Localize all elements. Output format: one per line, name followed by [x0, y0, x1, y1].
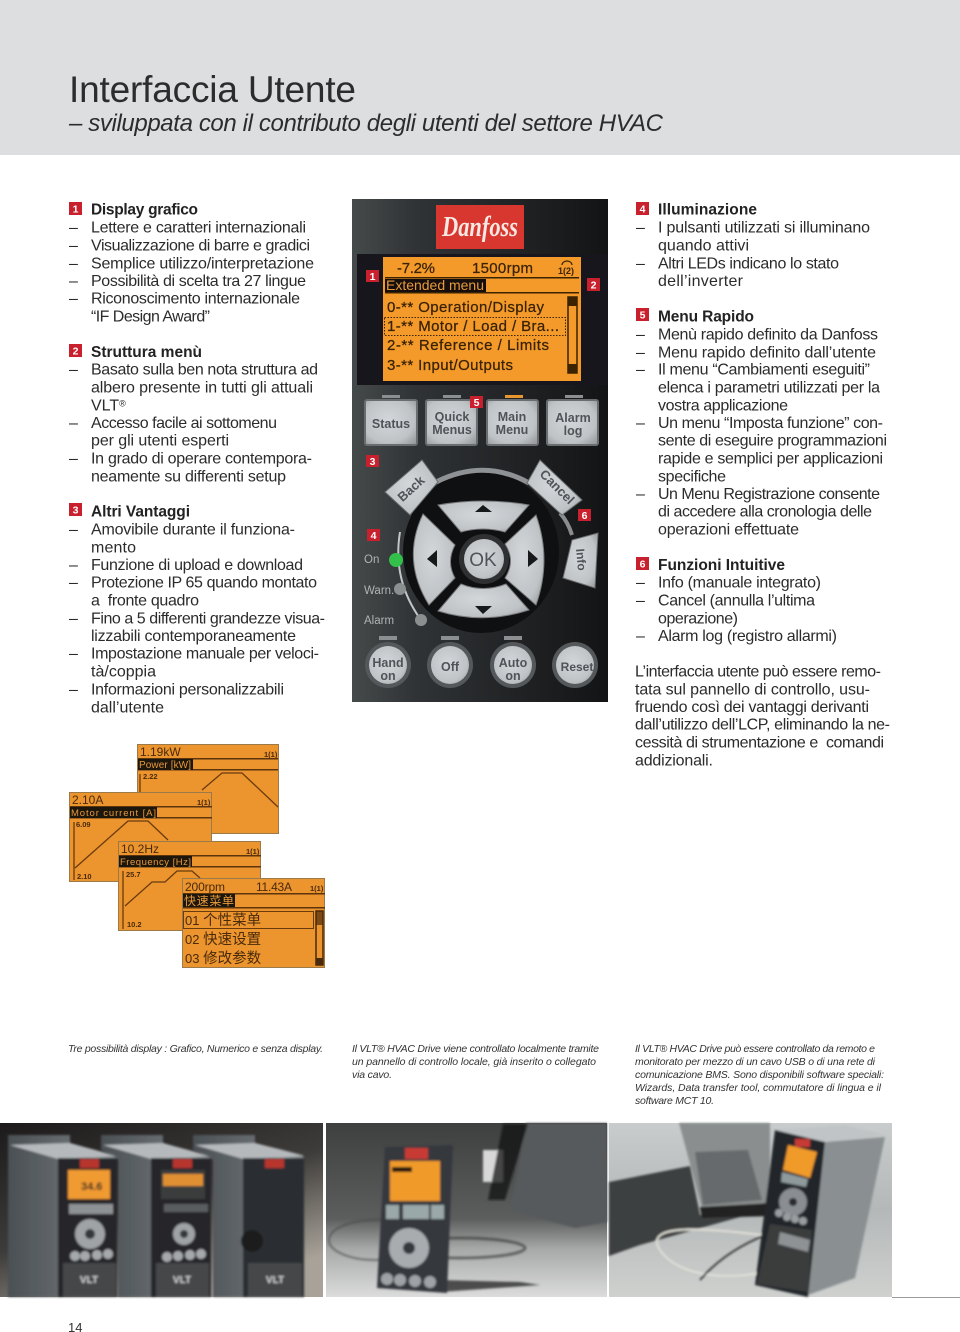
bottom keys: Reset: [561, 660, 593, 674]
drive with graphic display: 34.6: [81, 1181, 102, 1193]
section 5: menu rapido: –: [636, 326, 645, 344]
menu keys: [365, 395, 598, 445]
section 2: struttura menu: In grado di operare contempora-: [91, 450, 312, 468]
screen: power: 1(1): [264, 750, 278, 759]
drive with numeric display: [101, 1135, 211, 1297]
back, cancel, info keys and arc: Info: [573, 548, 589, 571]
section 1: display grafico: Visualizzazione di barre e gradici: [91, 238, 310, 254]
section 3: altri vantaggi: Protezione IP 65 quando montato: [91, 574, 317, 592]
display screen: 3-** Input/Outputs: [387, 357, 513, 374]
bottom keys: on: [505, 669, 521, 683]
badge 5: 5: [640, 310, 646, 322]
control panel device: [377, 1145, 453, 1293]
screen: motor current: Motor current [A]: [71, 808, 156, 819]
OK button: OK: [469, 550, 497, 571]
section 5: menu rapido: operazioni effettuate: [658, 522, 799, 538]
section 1: display grafico: –: [69, 256, 78, 272]
display screen: 1500rpm: [472, 260, 533, 277]
section 5: menu rapido: –: [636, 415, 645, 432]
section 6: funzioni intuitive: [636, 557, 837, 645]
section 4: illuminazione: I pulsanti utilizzati si illuminano: [658, 220, 870, 236]
bottom keys: on: [380, 669, 396, 683]
section 4: illuminazione: Illuminazione: [658, 202, 757, 218]
badge 3: [69, 503, 82, 516]
bottom keys: [365, 636, 598, 688]
screen: motor current: [70, 792, 212, 882]
back, cancel, info keys and arc: [385, 460, 598, 633]
section 4: illuminazione: –: [636, 256, 645, 272]
small display screens: [70, 744, 325, 968]
back, cancel, info keys and arc: Back: [394, 472, 428, 505]
screen: power: Power [kW]: [139, 760, 191, 771]
screen: quick menu: 11.43A: [256, 880, 292, 894]
section 5: menu rapido: –: [636, 344, 645, 362]
caption: display options: Tre possibilità display : Grafico, Numerico e senza display.: [68, 1043, 323, 1055]
section 4: illuminazione: dell’inverter: [658, 273, 744, 290]
badge 4: 4: [640, 204, 646, 216]
section 5: menu rapido: Menu rapido definito dall’utente: [658, 344, 876, 362]
back, cancel, info keys and arc: Cancel: [537, 466, 578, 507]
screen: frequency: 25.7: [126, 870, 141, 879]
closing paragraph: tata sul pannello di controllo, usu-: [635, 682, 870, 698]
section 2: struttura menu: Accesso facile ai sottomenu: [91, 415, 277, 432]
badge 1: 1: [73, 204, 79, 216]
section 3: altri vantaggi: –: [69, 682, 78, 698]
section 6: funzioni intuitive: Info (manuale integrato): [658, 574, 821, 592]
screen: motor current: 2.10: [77, 872, 92, 881]
section 2: struttura menu: Struttura menù: [91, 344, 202, 361]
menu keys: Menu: [496, 423, 528, 437]
menu keys: Menus: [432, 423, 472, 437]
status LEDs: Warn.: [364, 585, 394, 597]
section 6: funzioni intuitive: operazione): [658, 610, 738, 628]
screen: quick menu: [182, 878, 325, 968]
section 3: altri vantaggi: Amovibile durante il funziona-: [91, 522, 295, 538]
section 6: funzioni intuitive: Alarm log (registro allarmi): [658, 628, 837, 645]
section 1: display grafico: Display grafico: [91, 202, 198, 218]
badge 2: [69, 344, 82, 358]
section 3: altri vantaggi: [69, 503, 325, 716]
display screen: 2-** Reference / Limits: [387, 337, 549, 354]
section 5: menu rapido: –: [636, 362, 645, 378]
section 5: menu rapido: Menù rapido definito da Danfoss: [658, 326, 878, 344]
screen: power: 2.22: [143, 772, 158, 781]
screen: motor current: 2.10A: [72, 793, 103, 807]
bottom keys: Hand: [372, 656, 404, 670]
badge 3: 3: [73, 504, 79, 516]
closing paragraph: [635, 664, 890, 770]
screen: quick menu: 1(1): [310, 884, 324, 893]
section 2: struttura menu: ®: [119, 398, 126, 408]
title: Interfaccia Utente: [69, 69, 356, 110]
section 3: altri vantaggi: –: [69, 646, 78, 662]
section 1: display grafico: –: [69, 220, 78, 236]
display screen: -7.2%: [397, 260, 435, 277]
screen: motor current: 1(1): [197, 798, 211, 807]
navigation pad: [413, 501, 544, 618]
drive unit: [755, 1125, 885, 1297]
panel: LCP control panel: [352, 199, 608, 702]
section 6: funzioni intuitive: Cancel (annulla l’ultima: [658, 592, 815, 610]
callout markers: 1: [370, 271, 376, 283]
menu keys: Alarm: [555, 411, 591, 425]
screen: quick menu: 01 个性菜单: [185, 912, 261, 929]
badge 2: 2: [73, 346, 79, 358]
photo: drive connected to laptop: [609, 1123, 892, 1297]
section 6: funzioni intuitive: –: [636, 628, 645, 645]
section 3: altri vantaggi: Impostazione manuale per veloci-: [91, 646, 319, 662]
drive without display: [193, 1135, 304, 1297]
closing paragraph: fruendo così dei vantaggi derivanti: [635, 699, 869, 716]
section 5: menu rapido: sente di eseguire programmazioni: [658, 432, 887, 450]
caption: remote control: [635, 1043, 884, 1107]
closing paragraph: cessità di strumentazione e comandi: [635, 734, 884, 752]
caption: remote control: monitorato per mezzo di un cavo USB o di una rete di: [635, 1056, 876, 1068]
section 3: altri vantaggi: –: [69, 574, 78, 592]
section 3: altri vantaggi: –: [69, 610, 78, 628]
menu keys: Status: [372, 417, 410, 431]
display screen: 0-** Operation/Display: [387, 299, 544, 316]
screen: frequency: Frequency [Hz]: [120, 857, 191, 868]
closing paragraph: dall’utilizzo dell’LCP, eliminando la ne-: [635, 716, 890, 734]
caption: local control: Il VLT® HVAC Drive viene controllato localmente tramite: [352, 1043, 599, 1055]
header band: [0, 0, 960, 155]
caption: local control: via cavo.: [352, 1069, 392, 1081]
section 5: menu rapido: Il menu “Cambiamenti eseguiti”: [658, 362, 870, 378]
caption: remote control: comunicazione BMS. Sono disponibili software speciali:: [635, 1069, 884, 1081]
section 1: display grafico: Possibilità di scelta tra 27 lingue: [91, 273, 306, 290]
section 3: altri vantaggi: tà/coppia: [91, 664, 156, 680]
section 5: menu rapido: rapide e semplici per applicazioni: [658, 450, 883, 468]
badge 5: [636, 308, 649, 322]
section 2: struttura menu: [69, 344, 318, 486]
section 3: altri vantaggi: Funzione di upload e download: [91, 557, 303, 574]
section 3: altri vantaggi: –: [69, 522, 78, 538]
screen: quick menu: 03 修改参数: [185, 950, 262, 967]
closing paragraph: L’interfaccia utente può essere remo-: [635, 664, 881, 680]
callout markers: 4: [371, 530, 377, 542]
Danfoss logo: [436, 205, 524, 249]
drive with graphic display: [8, 1135, 117, 1297]
section 3: altri vantaggi: Fino a 5 differenti grandezze visua-: [91, 610, 325, 628]
Danfoss logo: Danfoss: [441, 211, 518, 243]
menu keys: Quick: [435, 410, 469, 424]
caption: remote control: software MCT 10.: [635, 1095, 714, 1107]
left column: features 1-3: [69, 202, 325, 716]
callout markers: 3: [370, 456, 376, 468]
section 4: illuminazione: [636, 202, 870, 290]
screen: quick menu: 200rpm: [185, 880, 225, 894]
section 3: altri vantaggi: Altri Vantaggi: [91, 504, 190, 520]
section 1: display grafico: –: [69, 238, 78, 254]
display screen: [357, 254, 608, 385]
section 3: altri vantaggi: mento: [91, 540, 136, 556]
callout markers: 5: [474, 397, 480, 409]
badge 4: [636, 202, 649, 216]
caption: local control: [352, 1043, 599, 1081]
callout markers: 2: [591, 280, 597, 292]
caption: local control: un pannello di controllo locale, già inserito o collegato: [352, 1056, 596, 1068]
section 2: struttura menu: –: [69, 415, 78, 432]
caption: remote control: Wizards, Data transfer tool, commutatore di lingua e il: [635, 1082, 882, 1094]
section 5: menu rapido: [636, 308, 887, 538]
photo: handheld panel: [326, 1123, 607, 1297]
section 6: funzioni intuitive: –: [636, 592, 645, 610]
section 5: menu rapido: Menu Rapido: [658, 308, 754, 326]
section 5: menu rapido: Un menu “Imposta funzione” con-: [658, 415, 883, 432]
section 3: altri vantaggi: a fronte quadro: [91, 592, 199, 610]
closing paragraph: addizionali.: [635, 752, 713, 770]
section 2: struttura menu: neamente su differenti setup: [91, 468, 286, 486]
section 1: display grafico: –: [69, 273, 78, 290]
screen: quick menu: 02 快速设置: [185, 931, 261, 948]
section 5: menu rapido: –: [636, 486, 645, 503]
section 3: altri vantaggi: Informazioni personalizzabili: [91, 682, 284, 698]
badge 6: [636, 557, 649, 570]
drive with numeric display: VLT: [173, 1275, 191, 1286]
status LEDs: [364, 532, 427, 627]
section 5: menu rapido: specifiche: [658, 468, 726, 486]
screen: quick menu: 快速菜单: [184, 894, 234, 908]
caption: remote control: Il VLT® HVAC Drive può essere controllato da remoto e: [635, 1043, 875, 1055]
right column: features 4-6: [635, 202, 890, 770]
subtitle: – sviluppata con il contributo degli utenti del settore HVAC: [68, 110, 664, 137]
section 1: display grafico: –: [69, 290, 78, 308]
section 5: menu rapido: elenca i parametri utilizzati per la: [658, 380, 880, 396]
status LEDs: On: [364, 554, 379, 566]
drive without display: VLT: [266, 1275, 284, 1286]
menu keys: Main: [498, 410, 526, 424]
section 4: illuminazione: Altri LEDs indicano lo stato: [658, 256, 839, 272]
menu keys: log: [564, 424, 582, 438]
section 2: struttura menu: Basato sulla ben nota struttura ad: [91, 362, 318, 378]
screen: power: 1.19kW: [140, 745, 181, 759]
callout markers: [366, 270, 600, 542]
screen: frequency: 10.2: [127, 920, 142, 929]
section 5: menu rapido: vostra applicazione: [658, 398, 788, 414]
section 2: struttura menu: per gli utenti esperti: [91, 432, 229, 450]
status LEDs: Alarm: [364, 615, 394, 627]
section 3: altri vantaggi: dall’utente: [91, 700, 164, 716]
screen: frequency: 1(1): [246, 847, 260, 856]
badge 6: 6: [640, 558, 646, 570]
bottom keys: Auto: [499, 656, 528, 670]
drive with graphic display: VLT: [80, 1275, 98, 1286]
section 2: struttura menu: albero presente in tutti gli attuali: [91, 380, 313, 396]
section 2: struttura menu: VLT: [91, 398, 119, 414]
badge 1: [69, 202, 82, 216]
section 5: menu rapido: Un Menu Registrazione consente: [658, 486, 880, 503]
screen: frequency: 10.2Hz: [121, 842, 159, 856]
bottom keys: Off: [441, 660, 460, 674]
section 1: display grafico: “IF Design Award”: [91, 308, 210, 326]
section 6: funzioni intuitive: Funzioni Intuitive: [658, 557, 785, 574]
display screen: 1(2): [558, 266, 574, 276]
screen: power: [138, 744, 278, 834]
screen: motor current: 6.09: [76, 820, 91, 829]
section 1: display grafico: Semplice utilizzo/interpretazione: [91, 256, 314, 272]
section 1: display grafico: Riconoscimento internazionale: [91, 290, 300, 308]
section 3: altri vantaggi: lizzabili contemporaneamente: [91, 628, 296, 645]
section 4: illuminazione: quando attivi: [658, 238, 749, 254]
section 4: illuminazione: –: [636, 220, 645, 236]
photo: three drives: [0, 1123, 323, 1297]
display screen: Extended menu: [386, 277, 484, 293]
callout markers: 6: [582, 510, 588, 522]
display screen: 1-** Motor / Load / Bra...: [387, 318, 559, 335]
screen: frequency: [118, 842, 261, 930]
section 2: struttura menu: –: [69, 450, 78, 468]
section 5: menu rapido: di accedere alla cronologia delle: [658, 504, 872, 520]
section 1: display grafico: [69, 202, 314, 326]
bottom rule: [892, 1297, 960, 1298]
section 1: display grafico: Lettere e caratteri internazionali: [91, 220, 306, 236]
section 3: altri vantaggi: –: [69, 557, 78, 574]
section 6: funzioni intuitive: –: [636, 574, 645, 592]
section 2: struttura menu: –: [69, 362, 78, 378]
